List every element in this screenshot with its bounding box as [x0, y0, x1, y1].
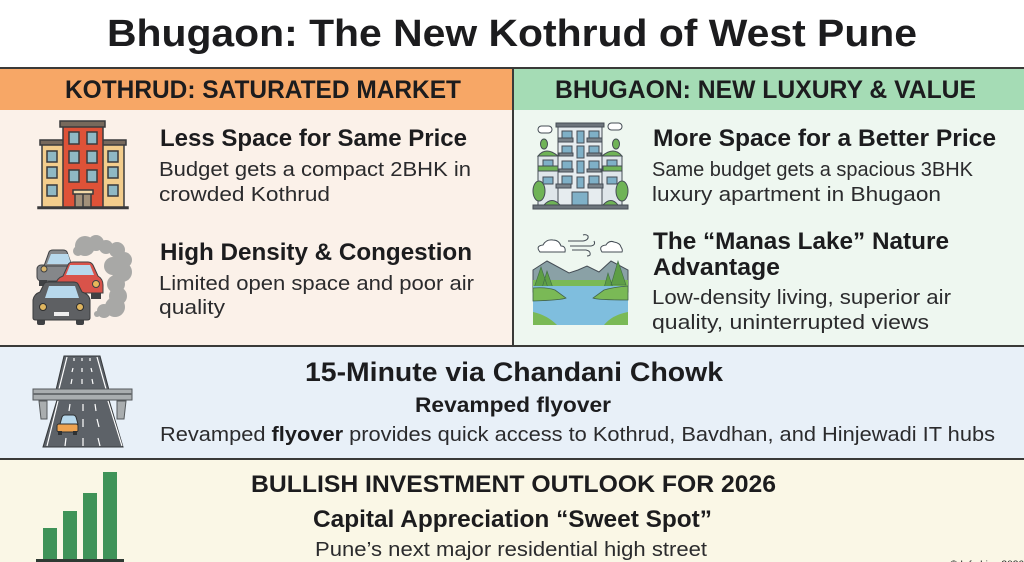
text block: high density: High Density & Congestion	[160, 239, 472, 266]
text block: investment outlook: Capital Appreciation “Sweet Spot”	[313, 506, 712, 533]
text block: high density: Limited open space and poor air	[159, 273, 474, 295]
panel: Kothrud saturated market	[0, 68, 512, 345]
text block: 15-minute access	[160, 357, 995, 446]
panel: connectivity band	[0, 346, 1024, 459]
panel header: Kothrud: KOTHRUD: SATURATED MARKET	[65, 76, 461, 104]
icon: luxury apartment with trees	[533, 123, 628, 209]
panel header: Kothrud	[0, 68, 512, 110]
text block: Manas Lake: Low-density living, superior air	[652, 287, 951, 309]
panel: investment outlook band	[0, 460, 1024, 562]
text block: more space: luxury apartment in Bhugaon	[652, 184, 941, 206]
icon: flyover road	[33, 356, 132, 447]
text block: investment outlook	[251, 471, 776, 561]
text block: Manas Lake: quality, uninterrupted views	[652, 312, 929, 334]
text block: Manas Lake: The “Manas Lake” Nature	[653, 228, 949, 255]
text block: less space: Less Space for Same Price	[160, 125, 467, 152]
text block: Manas Lake	[652, 228, 951, 334]
icon: cars and smoke	[33, 235, 132, 325]
text block: 15-minute access: 15-Minute via Chandani Chowk	[305, 357, 724, 387]
text block: high density: quality	[159, 297, 225, 319]
text block: less space	[159, 125, 471, 206]
text block: less space: crowded Kothrud	[159, 184, 330, 206]
text block: Manas Lake: Advantage	[653, 254, 780, 281]
text block: 15-minute access: Revamped flyover	[415, 394, 611, 417]
text block: 15-minute access: Revamped flyover provides quick access to Kothrud, Bavdhan, and Hinjewadi IT hubs	[160, 424, 995, 446]
text block: more space: Same budget gets a spacious 3BHK	[652, 159, 974, 181]
panel: Bhugaon new luxury and value	[512, 68, 1024, 345]
bar chart icon: rising green bars	[36, 472, 124, 562]
text block: high density	[159, 239, 474, 319]
icon: red apartment building	[38, 121, 128, 208]
title: Bhugaon: The New Kothrud of West Pune	[107, 13, 917, 55]
panel header: Bhugaon	[512, 68, 1024, 110]
text block: more space	[652, 125, 996, 206]
text block: investment outlook: Pune’s next major residential high street	[315, 539, 707, 561]
text block: investment outlook: BULLISH INVESTMENT OUTLOOK FOR 2026	[251, 471, 776, 498]
icon: lake and mountains	[533, 235, 628, 325]
text block: less space: Budget gets a compact 2BHK in	[159, 159, 471, 181]
panel header: Bhugaon: BHUGAON: NEW LUXURY & VALUE	[555, 76, 976, 104]
text block: more space: More Space for a Better Price	[653, 125, 996, 152]
